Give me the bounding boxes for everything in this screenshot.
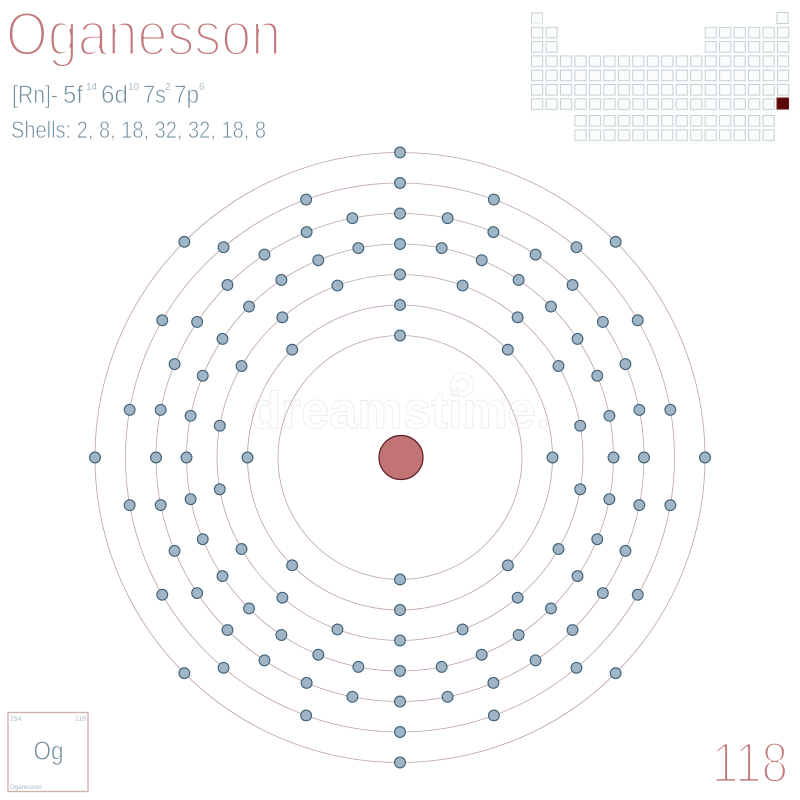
electron configuration: 7p [174, 81, 199, 109]
highlighted element cell [777, 98, 788, 109]
electron configuration: 7s [143, 81, 166, 109]
atomic mass: 294 [10, 716, 22, 723]
electron shell rings [95, 152, 705, 762]
electron configuration: 2 [165, 82, 171, 93]
element tile [8, 712, 88, 792]
periodic table locator [531, 12, 791, 144]
electrons: shell 5 [151, 208, 649, 707]
symbol: Og [34, 736, 64, 766]
element name: Oganesson [10, 784, 42, 791]
electrons: shell 2 [242, 300, 558, 615]
electron configuration [12, 81, 205, 109]
electron configuration: 6d [101, 81, 128, 109]
electrons: shell 4 [181, 239, 619, 676]
electron configuration: 14 [86, 82, 98, 93]
electrons: shell 7 [90, 147, 710, 768]
electron configuration: 6 [199, 82, 205, 93]
electrons: shell 6 [123, 178, 677, 737]
title: Oganesson [6, 0, 281, 68]
watermark: dreamstime. [250, 382, 550, 440]
atomic number: 118 [75, 716, 86, 723]
shell counts: Shells: 2, 8, 18, 32, 32, 18, 8 [11, 117, 266, 144]
electron configuration: 5f [63, 81, 83, 109]
electrons: shell 1 [395, 330, 405, 585]
electron configuration: 10 [128, 82, 140, 93]
electron configuration: [Rn]- [12, 81, 58, 109]
nucleus [379, 436, 423, 480]
electrons: shell 3 [214, 269, 586, 646]
